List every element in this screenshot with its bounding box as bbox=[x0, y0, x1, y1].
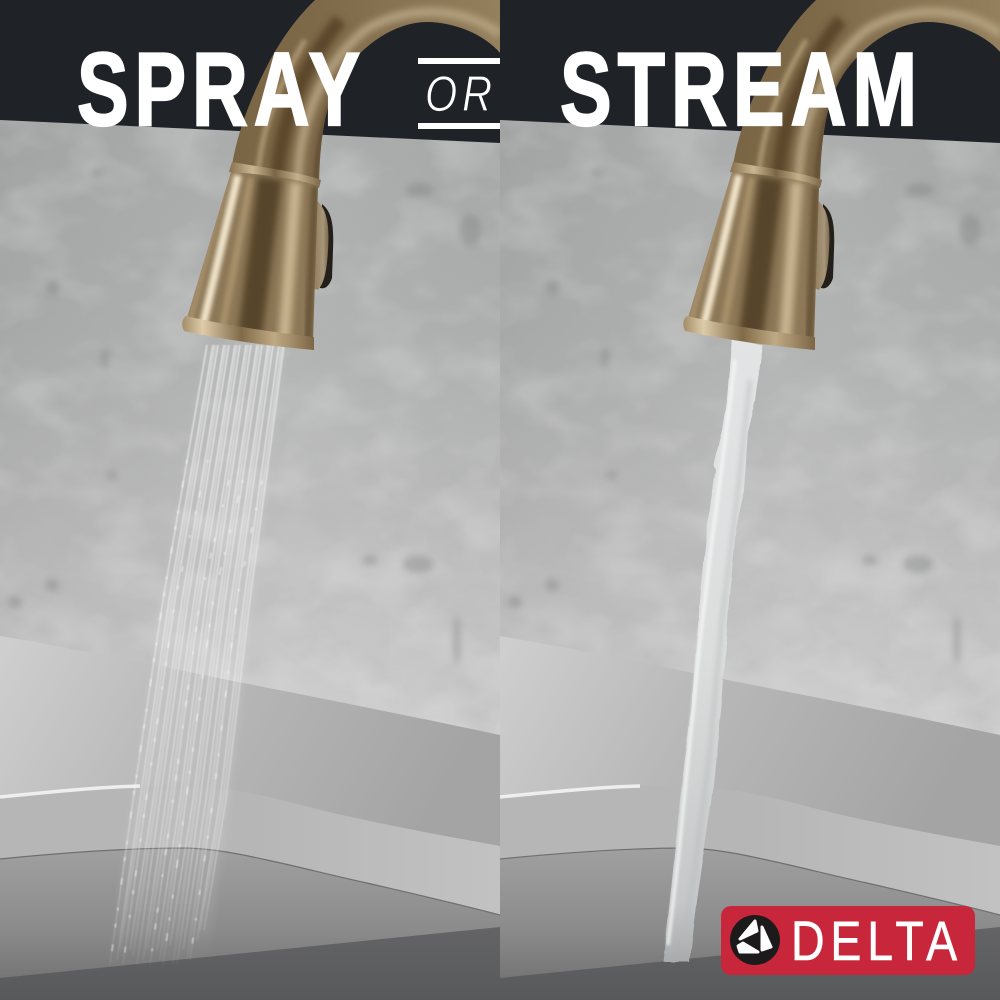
word OR: OR bbox=[425, 66, 497, 122]
heading: SPRAY: SPRAY bbox=[77, 32, 366, 148]
countertop front edge bbox=[0, 786, 500, 915]
lower rule bbox=[418, 123, 500, 129]
dark upper band bbox=[0, 0, 500, 143]
spray head body bbox=[187, 172, 318, 342]
Delta logo badge bbox=[721, 906, 975, 975]
red badge bbox=[721, 906, 975, 975]
wordmark: DELTA bbox=[791, 909, 963, 972]
edge highlight bbox=[0, 786, 140, 797]
gooseneck bbox=[231, 0, 500, 184]
countertop bbox=[0, 636, 500, 860]
marble wall bbox=[0, 100, 500, 750]
collar ring bbox=[229, 162, 321, 188]
faucet bbox=[182, 0, 500, 350]
basin rim line bbox=[0, 848, 500, 915]
panel: spray bbox=[0, 0, 500, 1000]
stream water bbox=[663, 338, 763, 962]
spray water bbox=[110, 345, 287, 965]
sink backdrop scene bbox=[500, 0, 1000, 1000]
sink basin bbox=[0, 848, 500, 985]
icon: delta tri-lobe mark bbox=[730, 915, 780, 965]
sink backdrop scene bbox=[0, 0, 500, 1000]
faucet bbox=[683, 0, 1000, 350]
OR divider bbox=[418, 58, 500, 129]
base ring bbox=[182, 316, 314, 350]
sink front bbox=[0, 927, 500, 1000]
upper rule bbox=[418, 58, 500, 64]
trigger button bbox=[313, 200, 333, 290]
panel: stream bbox=[500, 0, 1000, 1000]
